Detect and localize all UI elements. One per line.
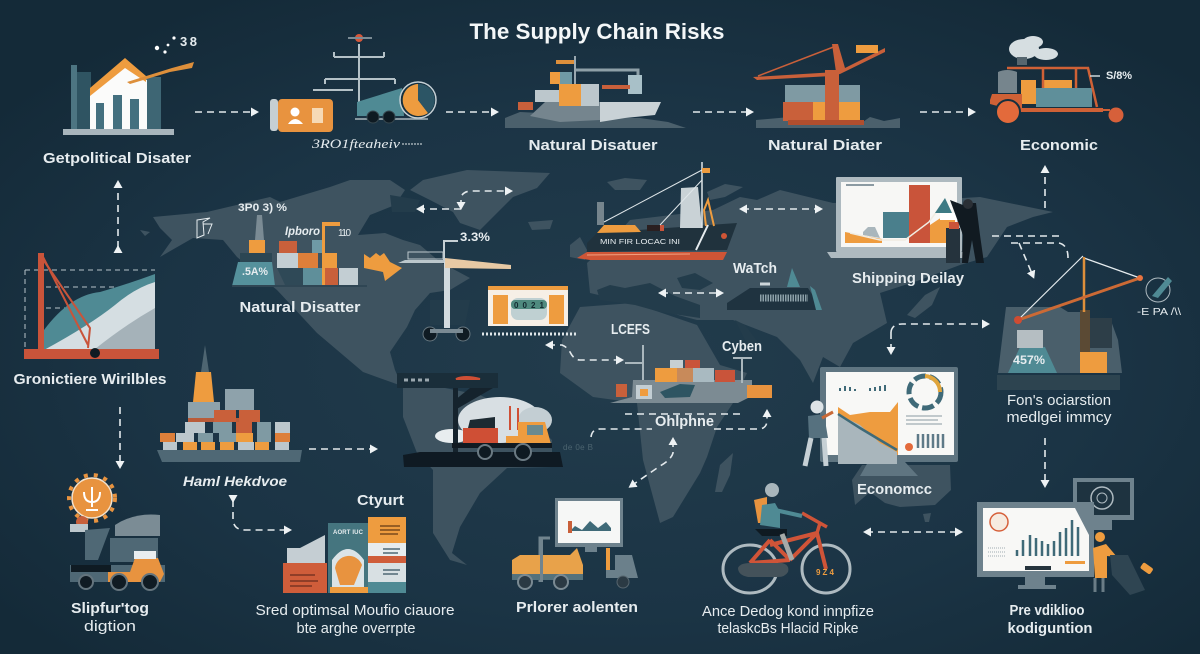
icon: gear and dump truck [69, 475, 165, 590]
arrow [195, 111, 256, 113]
label: economic: Economic [1020, 137, 1098, 154]
icon: gantry crane: 3.3% [460, 230, 490, 244]
icon: smoking truck [990, 36, 1132, 124]
arrow [548, 345, 621, 360]
label: ohlphine: Ohlphne [655, 413, 714, 430]
arrow [446, 111, 496, 113]
arrow [693, 111, 751, 113]
label: dashboard caption: Pre vdiklioo [1010, 602, 1084, 619]
icon: container stack ship [157, 345, 302, 462]
arrow [119, 407, 121, 466]
arrow [625, 413, 743, 415]
label: natural disaster 3: Natural Disatter [240, 299, 361, 316]
icon: orange data panel: 0021 [514, 301, 545, 310]
label: left mountains: Gronictiere Wirilbles [14, 371, 166, 388]
faint tag: de 0e B [563, 443, 593, 452]
arrow [309, 448, 375, 450]
arrow [920, 111, 973, 113]
label: right machine: Fon's ociarstion [1007, 392, 1111, 409]
label: cyclist caption [702, 603, 874, 637]
label: natural disaster 1: Natural Disatuer [528, 137, 658, 154]
icon: truck on dock [397, 373, 563, 467]
label: right machine [1006, 392, 1112, 426]
arrow [661, 292, 721, 294]
label: docs caption: bte arghe overrpte [296, 620, 416, 637]
label: shipping disruption [71, 600, 149, 635]
arrow [419, 208, 461, 210]
icon: cargo ship [610, 345, 772, 403]
label: right machine: medlgei immcy [1006, 409, 1112, 426]
label: shipping disruption: Slipfur'tog [71, 600, 149, 617]
arrow [1011, 243, 1068, 258]
label: watch: WaTch [733, 260, 777, 277]
icon: circle pen badge [1137, 277, 1181, 318]
label: shipping delay: Shipping Deilay [852, 270, 965, 287]
arrow [1019, 243, 1033, 276]
label: ctyurt: Ctyurt [357, 492, 404, 509]
icon: house bar chart: 38 [180, 34, 197, 49]
icon: natural disaster container ship [197, 202, 367, 287]
label: truck caption: Prlorer aolenten [516, 599, 638, 616]
icon: cyclist [723, 483, 850, 593]
arrow [402, 143, 422, 145]
arrow [631, 440, 673, 486]
arrow [1044, 168, 1046, 208]
arrow [591, 429, 652, 437]
icon: red hull ship [577, 162, 737, 260]
icon: monitor and delivery trucks [512, 498, 638, 589]
arrow [714, 412, 767, 429]
arrow [461, 191, 510, 207]
icon: document stack: AORT IUC [333, 530, 364, 536]
icon: crane on machine [997, 256, 1143, 390]
arrow [233, 500, 289, 530]
icon: dashboard monitors and worker [977, 478, 1154, 595]
icon: natural disaster container ship: .5A% [242, 266, 268, 278]
icon: tablet and tower tanker [270, 34, 436, 132]
arrow [890, 332, 892, 352]
icon: smoking truck: S/8% [1106, 70, 1132, 82]
label: geopolitical: Getpolitical Disater [43, 150, 191, 167]
icon: natural disaster container ship: Ipboro [285, 224, 320, 238]
label: docs caption: Sred optimsal Moufio ciauore [256, 602, 454, 619]
icon: document stack [283, 517, 406, 593]
icon: container ship [505, 56, 686, 128]
label: lcefs: LCEFS [611, 321, 650, 338]
icon: worker [805, 400, 833, 466]
icon: cyclist: 9Z4 [816, 568, 835, 577]
icon: orange data panel [482, 286, 578, 334]
icon: red hull ship: MIN FIR LOCAC INI [600, 239, 680, 246]
arrow [1044, 438, 1046, 485]
icon: gantry crane [398, 230, 511, 341]
title: The Supply Chain Risks [470, 19, 724, 44]
icon: dark ship [727, 268, 822, 310]
arrow [891, 324, 987, 332]
arrow [992, 235, 1059, 237]
label: cyclist caption: Ance Dedog kond innpfize [702, 603, 874, 620]
label: shipping disruption: digtion [84, 618, 136, 635]
label: economic 2: Economcc [857, 481, 932, 498]
world map [140, 170, 1053, 565]
label: cyben: Cyben [722, 338, 762, 355]
label: dashboard caption [1008, 602, 1092, 637]
icon: data monitor with worker [820, 367, 958, 476]
icon: laptop chart [827, 177, 963, 258]
icon: orange arrow [364, 253, 402, 281]
arrow [866, 531, 960, 533]
icon: house bar chart [63, 34, 197, 135]
icon: circle pen badge: -E PA /\\ [1137, 307, 1181, 318]
label: italic ship: Haml Hekdvoe [183, 473, 287, 489]
label: dashboard caption: kodiguntion [1008, 620, 1092, 637]
arrow [742, 208, 820, 210]
icon: port crane [753, 44, 900, 128]
label: natural disaster 2: Natural Diater [768, 137, 882, 154]
icon: crane on machine: 457% [1013, 353, 1045, 367]
label: tanker caption: 3RO1fteaheiv [311, 136, 400, 151]
label: cyclist caption: telaskcBs Hlacid Ripke [718, 620, 858, 637]
map seas [390, 195, 760, 350]
icon: mountain chart with crane [24, 253, 159, 359]
arrow [117, 183, 119, 248]
icon: presenter [935, 198, 984, 263]
label: docs caption [256, 602, 454, 637]
icon: natural disaster container ship: 3P0 3) % [238, 202, 287, 214]
icon: natural disaster container ship: 110 [338, 228, 351, 239]
